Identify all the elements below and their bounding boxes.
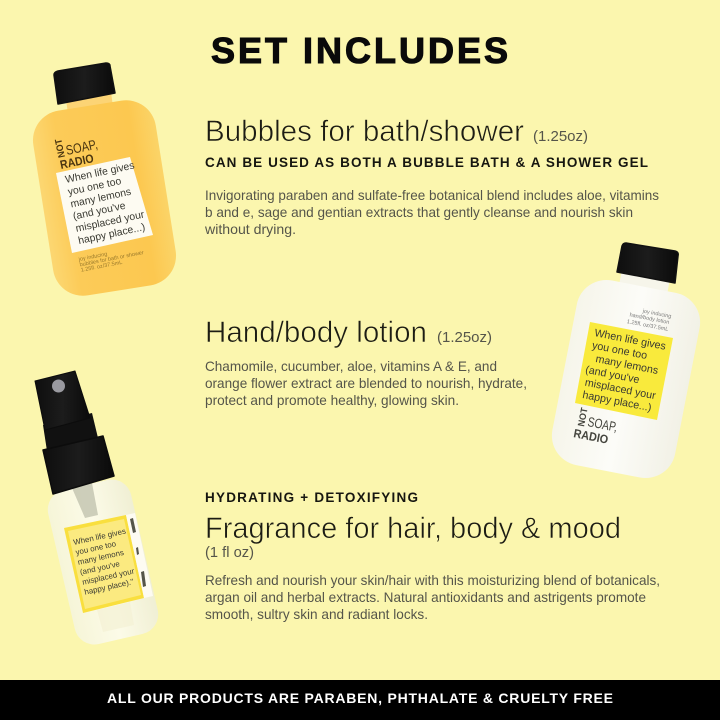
brand mark: SOAP, — [586, 414, 619, 435]
white label: you one too — [67, 176, 123, 198]
small print: joy inducing — [77, 252, 108, 263]
description — [205, 358, 527, 408]
description: Refresh and nourish your skin/hair with this moisturizing blend of botanicals, — [205, 572, 660, 588]
bottle neck — [66, 92, 114, 120]
small print: joy inducing — [641, 308, 672, 320]
eyebrow: HYDRATING + DETOXIFYING — [205, 490, 418, 505]
footer banner: ALL OUR PRODUCTS ARE PARABEN, PHTHALATE & CRUELTY FREE — [107, 690, 613, 706]
subheading: CAN BE USED AS BOTH A BUBBLE BATH & A SHOWER GEL — [205, 155, 648, 170]
white label: many lemons — [70, 187, 132, 210]
heading: Hand/body lotion — [205, 316, 427, 349]
bottle body — [29, 96, 180, 300]
brand mark — [53, 137, 99, 172]
spray nozzle — [35, 371, 90, 430]
heading: Fragrance for hair, body & mood — [205, 512, 621, 545]
bottle cap — [617, 243, 678, 283]
yellow label: happy place)." — [84, 577, 135, 597]
description: argan oil and herbal extracts. Natural antioxidants and astrigents promote — [205, 589, 646, 605]
small print: hand/body lotion — [629, 312, 670, 326]
title: SET INCLUDES — [211, 30, 508, 71]
white label: happy place...) — [77, 222, 146, 247]
white label: (and you've — [72, 201, 127, 223]
small print — [77, 245, 146, 274]
yellow label: happy place...) — [581, 389, 653, 414]
bottle body — [547, 275, 705, 483]
brand mark: NOT — [576, 407, 591, 428]
description: orange flower extract are blended to nourish, hydrate, — [205, 375, 527, 391]
yellow label: When life gives — [72, 527, 127, 547]
yellow label: (and you've — [584, 364, 641, 386]
yellow label: misplaced your — [81, 566, 135, 587]
footer banner — [0, 680, 720, 720]
section: bubbles — [204, 115, 659, 237]
yellow label: many lemons — [595, 353, 659, 377]
bottle neck — [618, 270, 670, 300]
product: white lotion bottle — [547, 243, 705, 483]
yellow label — [64, 513, 153, 613]
small print — [626, 308, 672, 333]
lower tube — [97, 602, 134, 632]
yellow label: misplaced your — [584, 377, 657, 402]
size: (1.25oz) — [533, 128, 588, 145]
size: (1 fl oz) — [205, 544, 254, 561]
section: fragrance — [205, 490, 660, 622]
heading: Bubbles for bath/shower — [205, 115, 524, 148]
brand mark: RADIO — [572, 426, 609, 447]
nozzle hole — [52, 380, 65, 392]
bottle cap — [54, 63, 115, 104]
yellow label: you one too — [75, 539, 118, 557]
description — [204, 187, 659, 237]
white label: misplaced your — [75, 209, 146, 235]
yellow label: When life gives — [593, 327, 667, 353]
description — [205, 572, 660, 622]
yellow label: (and you've — [79, 559, 121, 577]
spray neck — [43, 413, 98, 451]
description: smooth, sultry skin and radiant locks. — [205, 606, 428, 622]
description: b and e, sage and gentian extracts that gently cleanse and nourish skin — [205, 204, 633, 220]
description: protect and promote healthy, glowing skin. — [205, 392, 459, 408]
small print: bubbles for bath or shower — [79, 250, 145, 268]
product: orange bubbles bottle — [29, 63, 180, 300]
spray collar — [43, 436, 114, 494]
yellow label: you one too — [591, 340, 648, 362]
brand mark — [572, 407, 619, 447]
description: Chamomile, cucumber, aloe, vitamins A & E, and — [205, 358, 497, 374]
small print: 1.25fl. oz/37.5mL — [626, 319, 669, 333]
brand mark: RADIO — [59, 151, 95, 172]
strip marks — [130, 518, 146, 587]
section: lotion — [205, 316, 527, 408]
glass body — [44, 475, 162, 649]
yellow label: many lemons — [77, 548, 125, 567]
size: (1.25oz) — [437, 329, 492, 346]
brand mark: SOAP, — [65, 137, 99, 158]
small print: 1.25fl. oz/37.5mL — [80, 260, 123, 274]
dip tube — [72, 483, 98, 518]
product: fragrance spray bottle — [35, 371, 162, 649]
description: Invigorating paraben and sulfate-free botanical blend includes aloe, vitamins — [205, 187, 659, 203]
brand mark: NOT — [53, 138, 68, 159]
yellow label — [575, 322, 673, 420]
description: without drying. — [204, 221, 296, 237]
white label — [56, 157, 153, 253]
white label: When life gives — [64, 161, 136, 186]
